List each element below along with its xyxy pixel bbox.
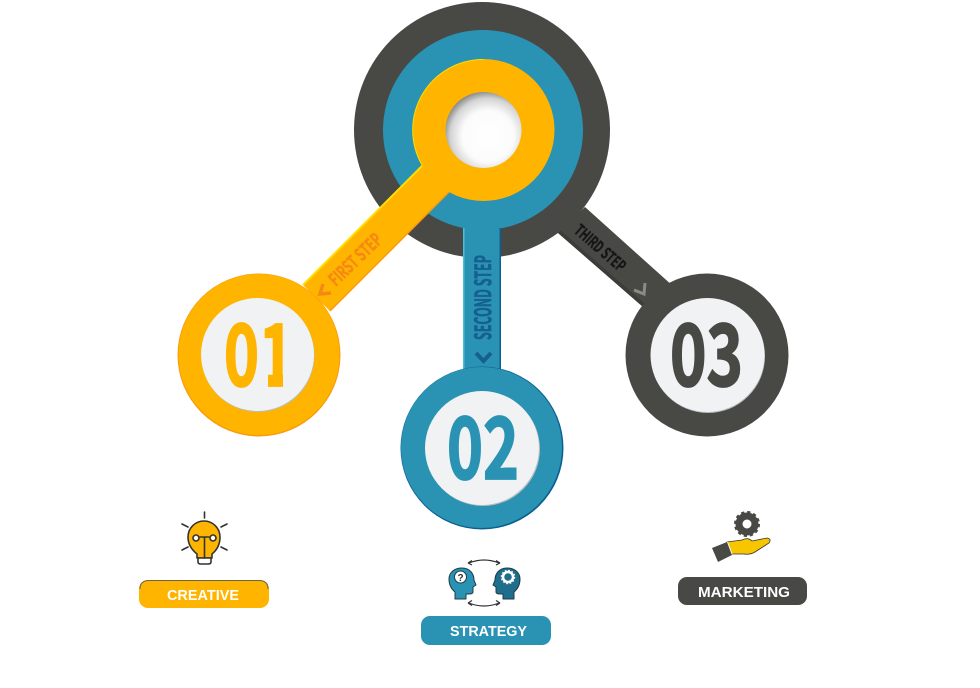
label: second step: SECOND STEP xyxy=(466,255,498,340)
label: third step: THIRD STEP xyxy=(570,218,632,276)
central target: yellow ring with first step arm xyxy=(303,59,554,311)
second step arm xyxy=(463,222,501,377)
step circle 01 xyxy=(178,274,340,436)
right head with gear xyxy=(493,568,520,599)
cuff xyxy=(712,542,732,562)
pill text: strategy: STRATEGY xyxy=(450,624,527,640)
step circle 02 xyxy=(400,366,564,530)
left head with question mark: ? xyxy=(457,573,464,584)
icon: hand holding gear xyxy=(712,512,770,562)
arrow: third step xyxy=(634,283,645,294)
number 03: 03 xyxy=(670,286,743,411)
central target: blue ring xyxy=(383,30,583,230)
exchange arrows xyxy=(468,560,500,606)
arrow: first step xyxy=(320,284,331,294)
gear xyxy=(736,512,758,536)
hand xyxy=(727,538,770,554)
third step arm xyxy=(558,207,674,313)
pill: strategy xyxy=(421,616,551,645)
central target: outer dark ring xyxy=(354,2,610,258)
central hole xyxy=(446,92,522,168)
arrow: second step xyxy=(476,353,491,361)
number 01: 01 xyxy=(224,286,294,411)
icon: two heads exchanging ideas xyxy=(449,560,520,606)
step circle 03 xyxy=(626,274,788,436)
pill text: marketing: MARKETING xyxy=(698,585,790,601)
pill text: creative: CREATIVE xyxy=(167,588,239,604)
icon: light bulb xyxy=(182,512,227,564)
number 02: 02 xyxy=(447,379,519,504)
pill: creative xyxy=(139,580,269,608)
pill: marketing xyxy=(678,577,807,605)
label: first step: FIRST STEP xyxy=(322,227,388,291)
